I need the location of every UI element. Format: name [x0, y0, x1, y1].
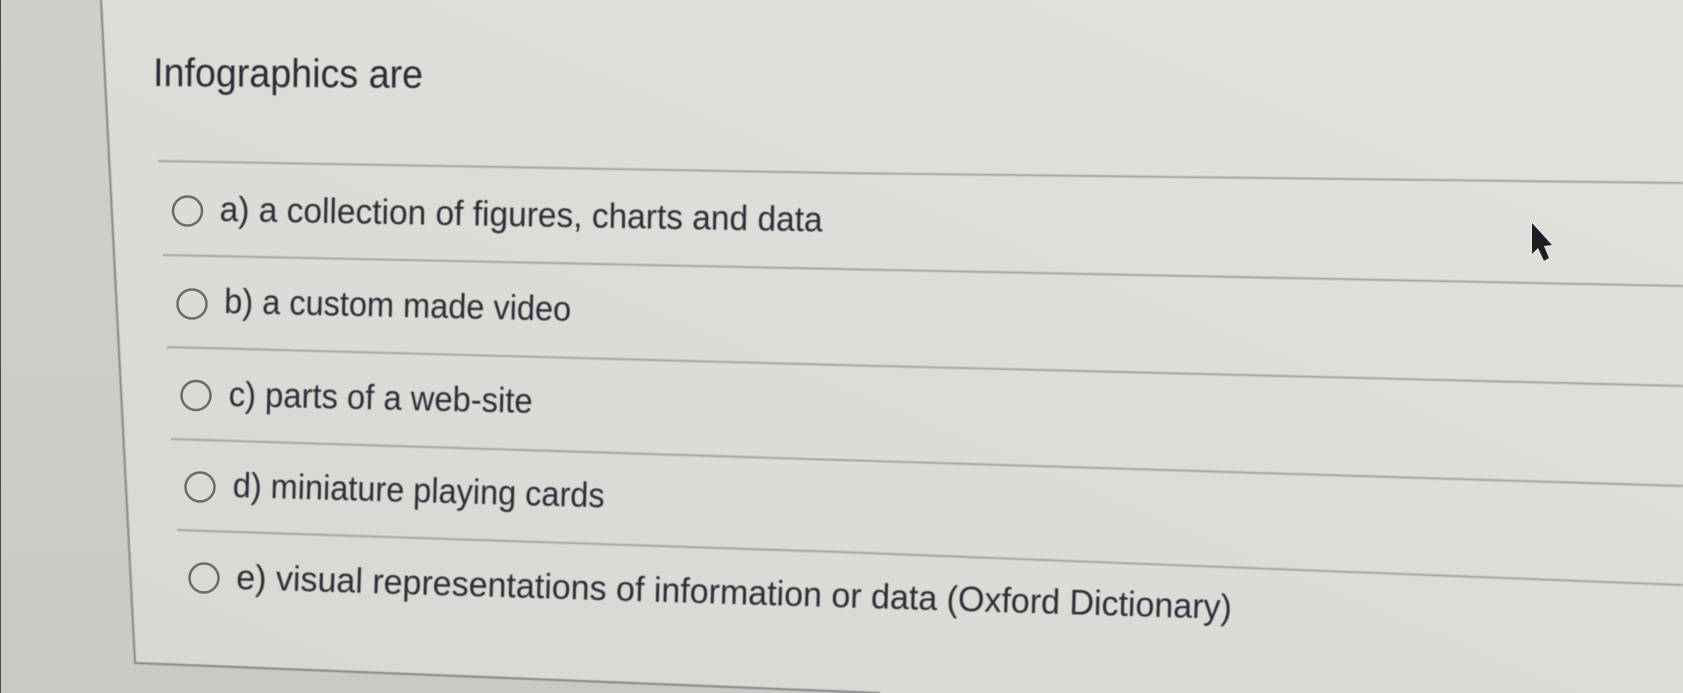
option a: [173, 190, 823, 240]
option b: [178, 282, 572, 329]
radio button c: [182, 381, 210, 410]
option d: [186, 466, 605, 515]
option a text: a) a collection of figures, charts and data: [219, 190, 823, 240]
option b text: b) a custom made video: [224, 282, 572, 329]
option d text: d) miniature playing cards: [232, 466, 605, 515]
card border: [101, 0, 880, 693]
radio button a: [173, 196, 202, 226]
panel: grey margin around the card: [0, 0, 880, 693]
radio button b: [178, 290, 206, 318]
divider lines between options: [158, 161, 1683, 585]
icon: mouse cursor arrow: [1532, 223, 1552, 261]
option e: [190, 558, 1232, 627]
option c: [182, 375, 533, 421]
radio button d: [186, 472, 214, 502]
heading: Infographics are: [153, 51, 423, 97]
option c text: c) parts of a web-site: [228, 375, 533, 421]
radio button e: [190, 564, 218, 592]
option e text: e) visual representations of information or data (Oxford Dictionary): [236, 558, 1232, 627]
